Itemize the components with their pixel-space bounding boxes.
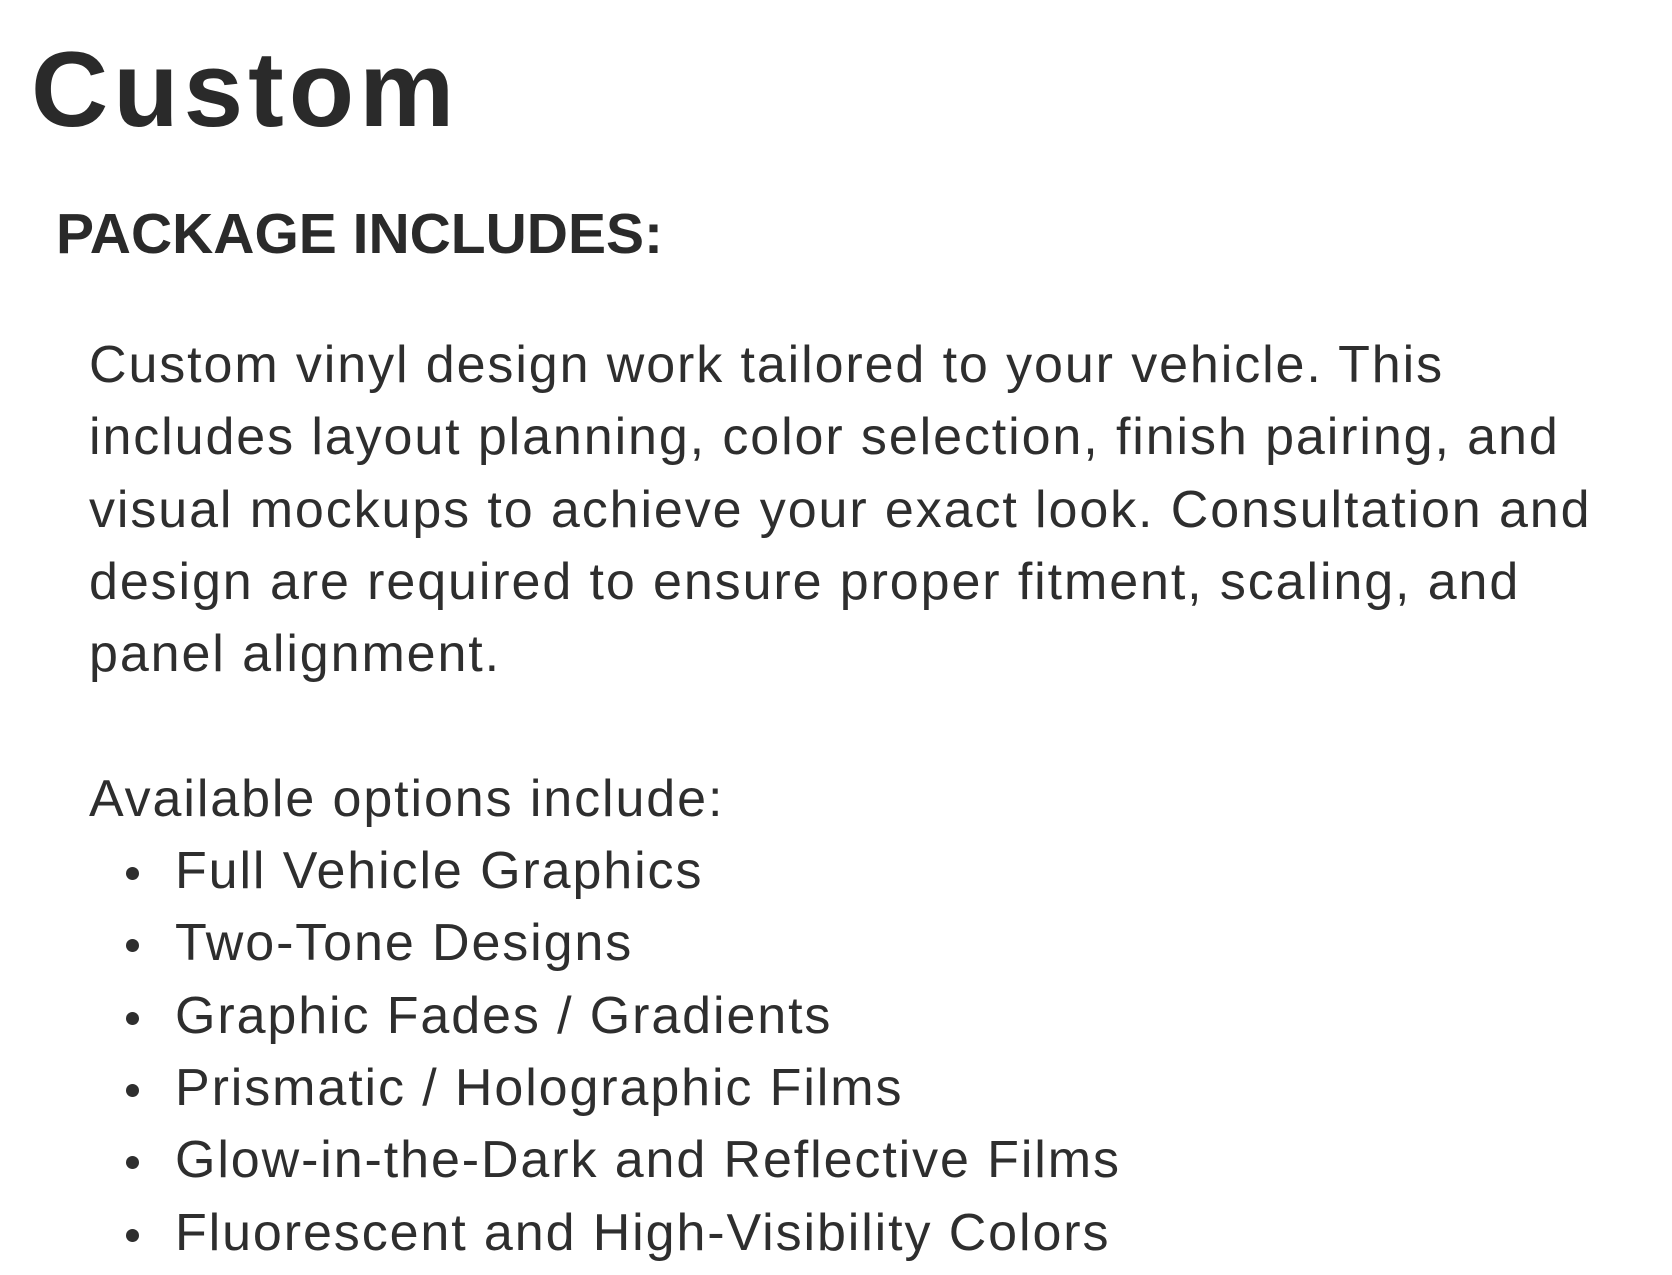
options list: Graphic Fades / Gradients (175, 987, 832, 1045)
options list: Prismatic / Holographic Films (175, 1059, 903, 1117)
options list: Two-Tone Designs (175, 914, 633, 972)
description paragraph: panel alignment. (89, 625, 501, 683)
description paragraph: design are required to ensure proper fitment, scaling, and (89, 553, 1520, 611)
description paragraph: visual mockups to achieve your exact look. Consultation and (89, 481, 1591, 539)
title: Custom (31, 29, 459, 149)
description paragraph: Custom vinyl design work tailored to your vehicle. This (89, 336, 1444, 394)
options list: Full Vehicle Graphics (175, 842, 703, 900)
text block: description and options (89, 336, 1591, 1262)
heading: package includes: PACKAGE INCLUDES: (56, 202, 663, 266)
description paragraph: includes layout planning, color selection, finish pairing, and (89, 408, 1560, 466)
options list (126, 842, 1121, 1262)
options list: Glow-in-the-Dark and Reflective Films (175, 1131, 1121, 1189)
options intro: Available options include: (89, 770, 724, 828)
description paragraph (89, 336, 1591, 683)
options list: Fluorescent and High-Visibility Colors (175, 1204, 1110, 1262)
